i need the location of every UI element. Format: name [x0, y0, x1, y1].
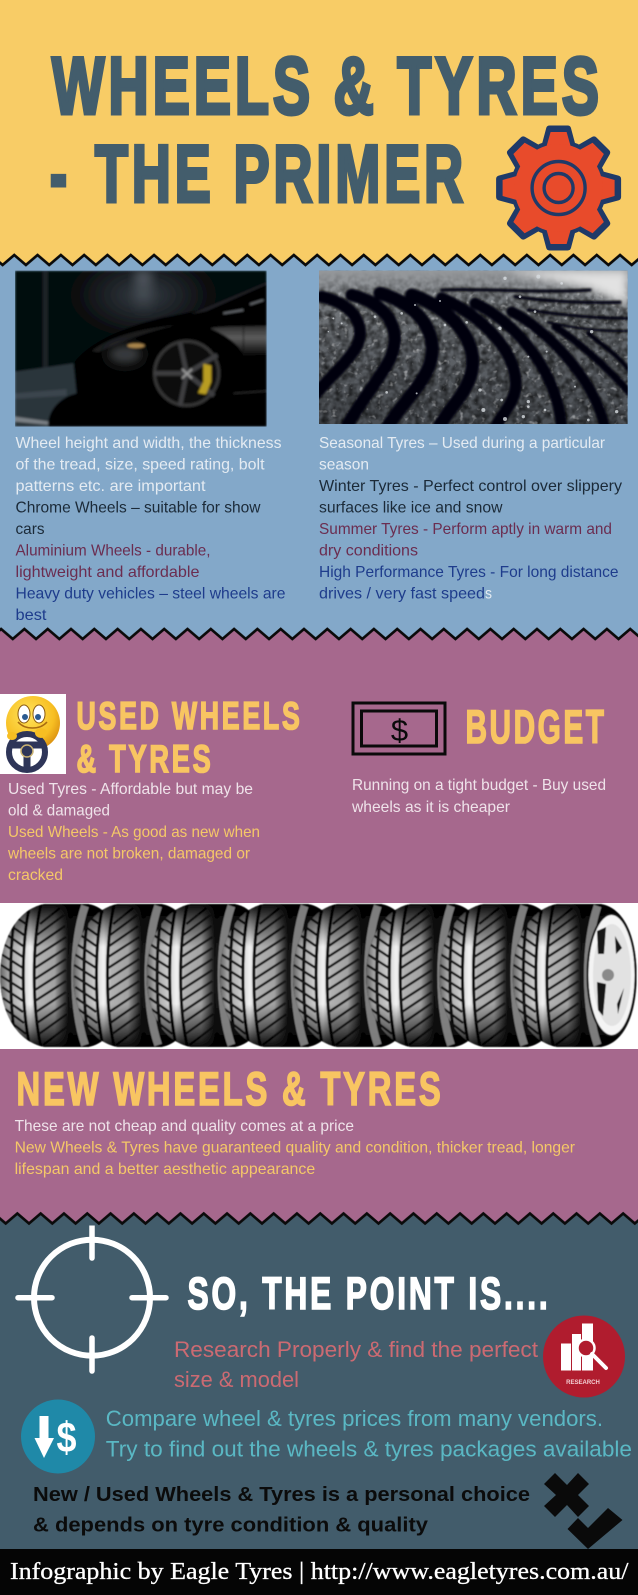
panel: wheels and tyres types: [0, 252, 638, 634]
text: tyre types: dry conditions: [319, 542, 418, 560]
icon: crosshair target: [18, 1225, 166, 1371]
text: personal choice: New / Used Wheels & Tyres is a personal choice: [33, 1483, 530, 1506]
text: wheel considerations: of the tread, size, speed rating, bolt: [16, 456, 265, 474]
text: research advice: size & model: [174, 1367, 299, 1392]
footer credit: Infographic by Eagle Tyres | http://www.eagletyres.com.au/: [10, 1559, 629, 1585]
icon: research magnifier: [543, 1316, 625, 1398]
photo: row of eight tyres: [0, 903, 638, 1049]
text: tyre types: Seasonal Tyres – Used during a particular: [319, 435, 606, 452]
text: compare prices: Compare wheel & tyres prices from many vendors.: [106, 1406, 603, 1431]
text: wheel considerations: Aluminium Wheels - durable,: [16, 542, 210, 560]
icon: banknote: [353, 703, 445, 754]
text: used tyres and wheels: [7, 781, 260, 884]
icon: cross and check: [544, 1473, 622, 1549]
text: budget advice: [351, 777, 606, 816]
text: wheel considerations: Chrome Wheels – suitable for show: [16, 500, 261, 516]
text: new tyres description: [15, 1118, 576, 1178]
panel: the point is: [0, 1219, 638, 1550]
text: wheel considerations: [16, 435, 286, 624]
photo: black sports car wheel: [15, 270, 267, 427]
footer: [0, 1549, 638, 1595]
text: tyre types: drives / very fast speed: [319, 586, 485, 602]
text: tyre types: [319, 435, 622, 602]
icon: price down: [21, 1400, 95, 1474]
text: budget advice: wheels as it is cheaper: [351, 799, 511, 816]
text: new tyres description: New Wheels & Tyres have guaranteed quality and condition, thicker tread, longer: [15, 1140, 576, 1157]
text: research advice: [174, 1337, 538, 1392]
zigzag dividers drawn over the seams: [0, 253, 638, 1226]
heading: used wheels and tyres: [76, 695, 302, 781]
text: personal choice: & depends on tyre condition & quality: [33, 1514, 429, 1537]
text: tyre types: High Performance Tyres - For long distance: [319, 564, 619, 581]
title: THE PRIMER: [95, 130, 467, 220]
heading: used wheels and tyres: USED WHEELS: [76, 695, 302, 738]
title: -: [50, 130, 67, 220]
text: wheel considerations: cars: [16, 521, 44, 538]
text: used tyres and wheels: wheels are not broken, damaged or: [7, 846, 251, 862]
panel: used wheels and budget: [0, 634, 638, 904]
text: budget advice: Running on a tight budget - Buy used: [352, 777, 606, 794]
panel: title banner: [0, 0, 638, 260]
text: wheel considerations: Wheel height and width, the thickness: [16, 435, 282, 452]
text: used tyres and wheels: old & damaged: [8, 802, 110, 820]
text: wheel considerations: best: [16, 607, 47, 624]
text: tyre types: Winter Tyres - Perfect control over slippery: [319, 478, 622, 495]
text: compare prices: Try to find out the wheels & tyres packages available: [106, 1437, 632, 1462]
text: tyre types: Summer Tyres - Perform aptly in warm and: [319, 521, 612, 538]
icon: emoji driving: [0, 694, 66, 774]
text: research advice: Research Properly & find the perfect: [174, 1337, 538, 1362]
icon: gear: [500, 129, 618, 247]
text: tyre types: s: [485, 586, 492, 602]
text: wheel considerations: lightweight and affordable: [16, 564, 200, 581]
text: tyre types: season: [319, 456, 369, 474]
text: tyre types: surfaces like ice and snow: [319, 500, 503, 516]
icon: banknote: $: [391, 713, 408, 748]
text: used tyres and wheels: Used Tyres - Affordable but may be: [8, 781, 253, 798]
text: new tyres description: lifespan and a better aesthetic appearance: [15, 1161, 315, 1178]
text: wheel considerations: Heavy duty vehicles – steel wheels are: [16, 586, 286, 602]
heading: used wheels and tyres: & TYRES: [76, 738, 214, 781]
text: wheel considerations: patterns etc. are important: [16, 478, 206, 495]
text: compare prices: [106, 1406, 632, 1462]
title: [50, 42, 603, 220]
photo: wet tyre tread: [317, 271, 630, 428]
icon: research magnifier: RESEARCH: [566, 1380, 600, 1386]
text: new tyres description: These are not cheap and quality comes at a price: [15, 1118, 354, 1135]
text: used tyres and wheels: Used Wheels - As good as new when: [8, 824, 260, 841]
heading: new wheels and tyres: NEW WHEELS & TYRES: [16, 1062, 444, 1115]
text: personal choice: [33, 1483, 530, 1537]
text: used tyres and wheels: cracked: [8, 867, 63, 884]
icon: price down: $: [56, 1414, 77, 1462]
panel: new wheels and tyres: [0, 1049, 638, 1215]
